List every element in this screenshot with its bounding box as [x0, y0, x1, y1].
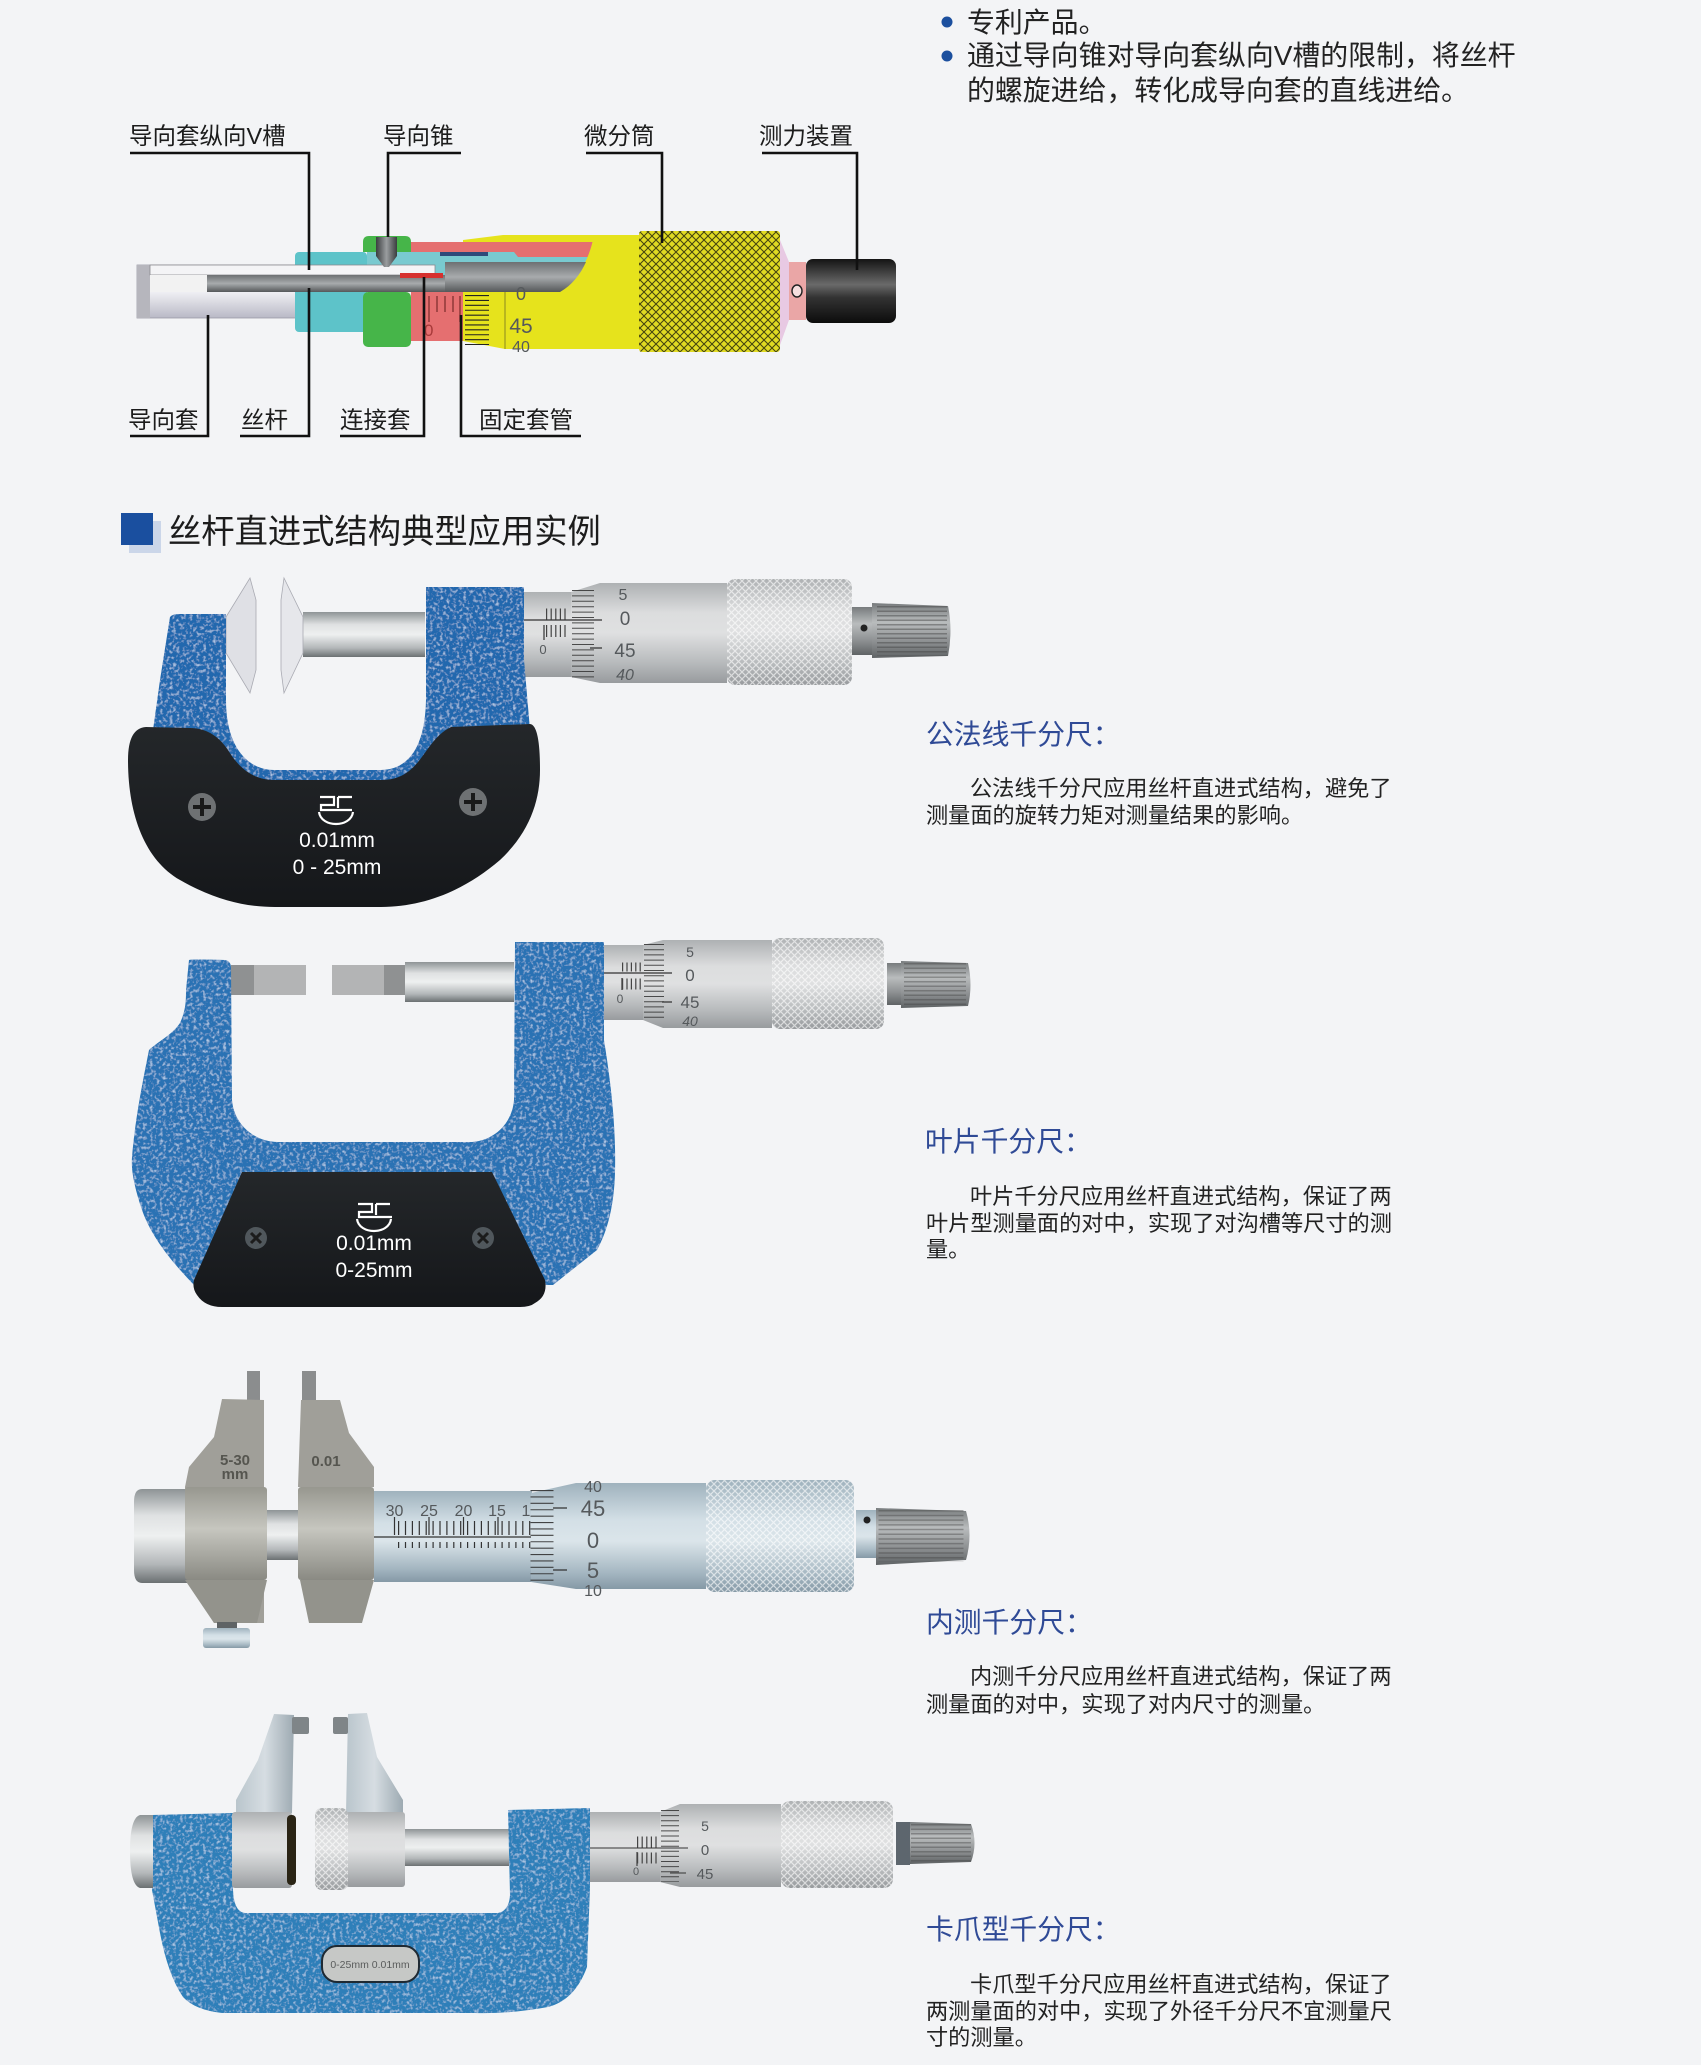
text: caliper-jaw micrometer [926, 1914, 1392, 2050]
left jaw [232, 1714, 309, 1888]
barrel and linear scale: 1 [522, 1503, 531, 1520]
barrel, thimble and scale: 45 [681, 993, 699, 1012]
text: blade micrometer: 叶片千分尺应用丝杆直进式结构，保证了两 [970, 1184, 1392, 1209]
text: gong fa xian micrometer: 公法线千分尺应用丝杆直进式结构，避免了 [970, 776, 1392, 801]
thimble scale: 45 [509, 315, 533, 338]
text: blade micrometer: 量。 [926, 1237, 970, 1262]
barrel, thimble and scale: 5 [686, 944, 694, 960]
right jaw: 0.01 [311, 1453, 341, 1470]
leader lines and part labels: 导向锥 [383, 123, 454, 149]
ratchet [896, 1822, 974, 1865]
micrometer 2: blade type [132, 938, 970, 1307]
text: inside micrometer: 内测千分尺： [926, 1607, 1093, 1638]
ratchet [856, 1508, 970, 1565]
barrel, thimble and scale: 45 [697, 1866, 713, 1883]
black nameplate [128, 724, 540, 907]
groove band and spindle [137, 265, 445, 318]
text: inside micrometer: 内测千分尺应用丝杆直进式结构，保证了两 [970, 1664, 1392, 1689]
blade anvils and spindle [231, 962, 514, 1002]
left jaw [185, 1371, 267, 1623]
guide cone pin [376, 237, 397, 267]
barrel, thimble and scale: 45 [614, 641, 636, 662]
thimble scale [477, 284, 533, 356]
spindle [303, 612, 425, 657]
structure cutaway diagram [137, 231, 896, 356]
barrel, thimble and scale [524, 583, 727, 684]
micrometer 3: inside type [134, 1371, 970, 1648]
barrel, thimble and scale: 5 [701, 1818, 709, 1834]
leader lines and part labels: 丝杆 [241, 407, 288, 433]
screws [188, 788, 487, 821]
ratchet [887, 961, 970, 1008]
text: caliper-jaw micrometer: 卡爪型千分尺应用丝杆直进式结构，保证了 [970, 1972, 1392, 1997]
left jaw: 5-30 [220, 1452, 250, 1469]
barrel and linear scale: 25 [420, 1503, 438, 1520]
thimble scale: 0 [516, 284, 526, 304]
top bullet list: 通过导向锥对导向套纵向V槽的限制，将丝杆 [967, 40, 1516, 71]
section heading: 丝杆直进式结构典型应用实例 [168, 514, 601, 551]
barrel and linear scale: 15 [488, 1503, 506, 1520]
red fixed sleeve [411, 292, 463, 341]
text: caliper-jaw micrometer: 卡爪型千分尺： [926, 1914, 1121, 1945]
barrel, thimble and scale: 40 [616, 667, 634, 684]
thimble and scale: 0 [587, 1528, 599, 1553]
barrel, thimble and scale: 0 [617, 992, 624, 1006]
leader lines and part labels: 测力装置 [759, 123, 853, 149]
green collar [363, 236, 411, 347]
logo and specification: 0.01mm [336, 1232, 412, 1255]
blue frame [132, 942, 615, 1285]
barrel, thimble and scale [604, 940, 772, 1029]
end cap [130, 1815, 153, 1888]
text: inside micrometer: 测量面的对中，实现了对内尺寸的测量。 [926, 1692, 1325, 1717]
barrel, thimble and scale: 0 [701, 1842, 709, 1859]
logo and specification [293, 797, 381, 879]
knurled grip [639, 231, 780, 352]
knurled thimble grip [781, 1801, 893, 1888]
screws [245, 1227, 494, 1249]
text: gong fa xian micrometer [926, 719, 1392, 828]
thimble and scale: 45 [581, 1496, 605, 1521]
barrel and linear scale: 20 [455, 1503, 472, 1520]
disc anvils [226, 578, 303, 693]
text: caliper-jaw micrometer: 两测量面的对中，实现了外径千分尺不宜测量尺 [926, 1999, 1392, 2024]
micrometer 1: disc type [128, 578, 950, 907]
text: gong fa xian micrometer: 公法线千分尺： [926, 719, 1121, 750]
logo and specification [335, 1204, 413, 1282]
thimble and scale: 5 [587, 1558, 599, 1583]
logo and specification: 0 - 25mm [293, 856, 381, 879]
leader lines and part labels: 微分筒 [584, 123, 654, 149]
knurled thimble grip [772, 938, 884, 1029]
thimble and scale [531, 1479, 706, 1600]
micrometer 4: caliper-jaw type [130, 1713, 974, 2013]
barrel, thimble and scale: 40 [682, 1013, 698, 1029]
blue frame [152, 1808, 590, 2013]
thimble and scale: 40 [584, 1479, 602, 1496]
text: blade micrometer [925, 1126, 1392, 1262]
right jaw [298, 1371, 374, 1623]
ratchet [852, 603, 950, 658]
barrel and linear scale: 30 [386, 1503, 404, 1520]
top bullet list: 专利产品。 [967, 7, 1106, 38]
text: blade micrometer: 叶片型测量面的对中，实现了对沟槽等尺寸的测 [926, 1211, 1392, 1236]
ratchet force device [780, 240, 896, 345]
oval nameplate [322, 1946, 419, 1982]
text: caliper-jaw micrometer: 寸的测量。 [926, 2025, 1037, 2050]
knurled thimble grip [706, 1480, 854, 1592]
leader lines and part labels: 导向套 [128, 407, 198, 433]
leader lines and part labels [128, 123, 857, 436]
thimble scale: 40 [512, 339, 530, 356]
barrel, thimble and scale: 0 [685, 966, 695, 985]
top bullet list [942, 7, 1516, 106]
thimble and scale: 10 [584, 1583, 602, 1600]
text: inside micrometer [926, 1607, 1392, 1717]
blue frame [153, 587, 530, 790]
right jaw [315, 1713, 405, 1890]
barrel and linear scale [374, 1491, 568, 1582]
text: blade micrometer: 叶片千分尺： [925, 1126, 1092, 1157]
black nameplate [193, 1172, 546, 1307]
leader lines and part labels: 连接套 [340, 407, 410, 433]
barrel, thimble and scale: 0 [539, 642, 547, 657]
knurled thimble grip [727, 579, 852, 685]
barrel, thimble and scale: 5 [619, 587, 628, 604]
logo and specification: 0-25mm [335, 1259, 413, 1282]
cyan housing [295, 252, 367, 332]
barrel, thimble and scale: 0 [633, 1866, 639, 1878]
leader lines and part labels: 导向套纵向V槽 [129, 123, 286, 149]
cutaway interior [367, 235, 639, 292]
red fixed sleeve: 0 [424, 321, 433, 340]
logo and specification: 0.01mm [299, 829, 375, 852]
connecting rod and end cylinder [134, 1489, 299, 1583]
lock screw [203, 1622, 250, 1648]
left jaw: mm [222, 1466, 248, 1483]
text: gong fa xian micrometer: 测量面的旋转力矩对测量结果的影响。 [926, 803, 1303, 828]
guide sleeve tube [137, 265, 297, 318]
top bullet list: 的螺旋进给，转化成导向套的直线进给。 [967, 75, 1469, 106]
spindle [402, 1829, 509, 1866]
yellow thimble body [463, 292, 639, 349]
barrel, thimble and scale: 0 [620, 609, 630, 630]
leader lines and part labels: 固定套管 [479, 407, 573, 433]
oval nameplate: 0-25mm 0.01mm [330, 1959, 410, 1971]
barrel, thimble and scale [590, 1804, 781, 1887]
